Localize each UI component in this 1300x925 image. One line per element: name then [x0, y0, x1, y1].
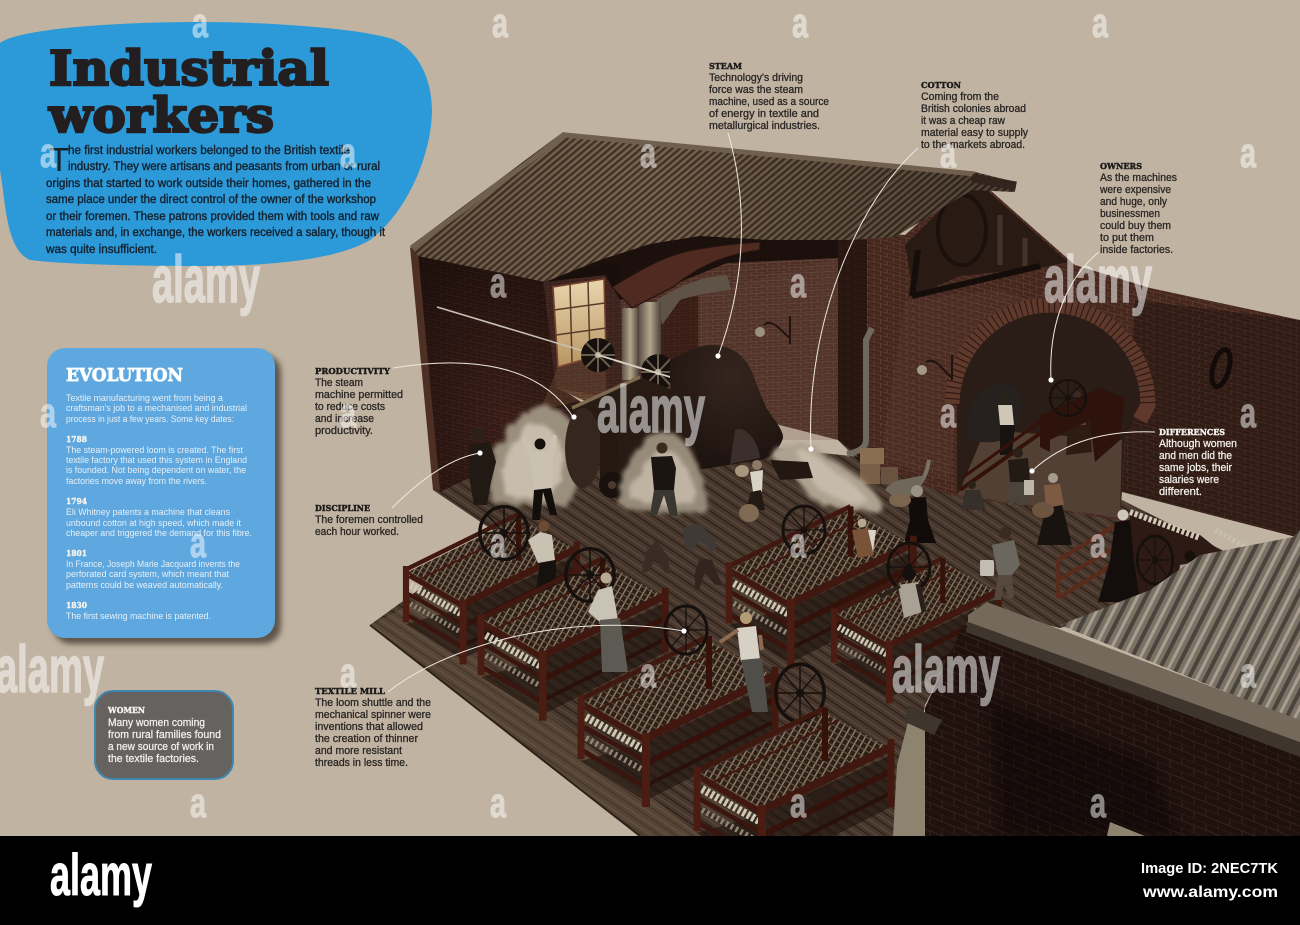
figure: woman in long black dress [1098, 510, 1140, 602]
leader: cotton [811, 148, 918, 449]
date 1794: Eli Whitney patents a machine that cleans [66, 507, 230, 517]
date 1801 [66, 549, 240, 590]
figure: woman at loom 2 [588, 572, 628, 672]
drainpipe [847, 328, 872, 454]
date 1788: The steam-powered loom is created. The first [66, 445, 243, 455]
stock watermarks: a [492, 0, 508, 46]
callout: differences: DIFFERENCES [1159, 428, 1225, 438]
callout: owners: and huge, only [1100, 196, 1168, 208]
callout: differences: different. [1159, 486, 1202, 498]
loom 3 [581, 636, 775, 807]
callout: productivity: to reduce costs [315, 401, 385, 413]
title [48, 41, 329, 144]
loom 6 [834, 558, 999, 703]
evolution intro: process in just a few years. Some key dates: [66, 414, 234, 424]
callout: owners: to put them [1100, 232, 1154, 244]
callout: textile mill [315, 687, 431, 769]
callout: discipline: The foremen controlled [315, 514, 423, 526]
left inner wall [410, 247, 600, 492]
right brick wall [838, 175, 1300, 538]
roof [410, 132, 1016, 282]
date 1801: patterns could be weaved automatically. [66, 580, 223, 590]
callout: cotton [921, 81, 1029, 151]
figure: worker at loom 6 [880, 568, 924, 618]
intro text: T [49, 141, 69, 178]
stock watermarks: alamy [1044, 242, 1152, 316]
callout: owners [1099, 162, 1177, 256]
figure: child at loom [852, 518, 876, 558]
cotton pile centre [618, 432, 707, 514]
front brick wall [925, 625, 1300, 836]
wheel 1 [480, 507, 528, 559]
callout: differences: salaries were [1159, 474, 1219, 486]
callout: steam: STEAM [709, 62, 742, 72]
loom 1 [406, 514, 577, 665]
evolution intro: Textile manufacturing went from being a [66, 393, 224, 403]
callout: steam: machine, used as a source [709, 96, 829, 108]
figure: shirtless worker [798, 720, 838, 824]
intro text: or their foremen. These patrons provided them with tools and raw [46, 209, 379, 223]
stock watermarks: a [1240, 649, 1256, 696]
cotton pile left [489, 407, 582, 507]
figure: woman with basket [1032, 473, 1072, 545]
callout: differences: same jobs, their [1159, 462, 1232, 474]
date 1830: 1830 [66, 601, 87, 611]
stock watermarks: a [1090, 779, 1106, 826]
evolution panel body [47, 348, 275, 638]
wheel 3 [665, 606, 707, 654]
leader: textile mill [388, 625, 684, 692]
footer website: www.alamy.com [1142, 884, 1278, 901]
intro text: industry. They were artisans and peasants from urban or rural [68, 159, 380, 173]
women text: Many women coming [108, 717, 205, 729]
stock watermarks: a [640, 649, 656, 696]
figure: worker at loom 1 [528, 520, 556, 590]
callout: textile mill: the creation of thinner [315, 733, 418, 745]
stock watermarks: alamy [0, 632, 104, 706]
duct and brick hood [612, 242, 760, 380]
stock watermarks: a [340, 649, 356, 696]
callout: productivity [315, 367, 403, 437]
stock watermarks: a [1092, 0, 1108, 46]
callout: cotton: material easy to supply [921, 127, 1029, 139]
leader: owners [1051, 252, 1099, 380]
stock watermarks: a [790, 259, 806, 306]
evolution intro: craftsman's job to a mechanised and industrial [66, 403, 247, 413]
wall lamp right [917, 355, 952, 380]
title: workers [48, 88, 274, 144]
factory floor [370, 430, 1262, 836]
women panel body [95, 691, 233, 779]
callout: differences [1159, 428, 1237, 498]
women text [107, 706, 221, 765]
callout: owners: businessmen [1100, 208, 1160, 220]
back right looms [1058, 512, 1260, 605]
callout: owners: inside factories. [1100, 244, 1173, 256]
stock watermarks: a [790, 779, 806, 826]
steam machine [565, 345, 783, 500]
callout: productivity: productivity. [315, 425, 373, 437]
stock watermarks: a [792, 0, 808, 46]
callout: textile mill: The loom shuttle and the [315, 697, 431, 709]
elbow pipe [900, 460, 929, 495]
figure: man with can [1008, 448, 1034, 505]
wall lamp [755, 316, 790, 344]
callout: textile mill: inventions that allowed [315, 721, 423, 733]
callout: differences: Although women [1159, 438, 1237, 450]
stock watermarks: alamy [597, 372, 705, 446]
callout: productivity: and increase [315, 413, 374, 425]
stock watermarks: alamy [152, 242, 260, 316]
loom inside arch [960, 388, 1125, 490]
panel: evolution [47, 348, 281, 644]
stock watermarks: a [1240, 389, 1256, 436]
back wall with window [543, 228, 838, 440]
callout: productivity: PRODUCTIVITY [315, 367, 391, 377]
stock watermarks: a [490, 259, 506, 306]
cotton pile right [770, 443, 884, 511]
stock watermarks: a [340, 129, 356, 176]
callout: productivity: The steam [315, 377, 363, 389]
evolution panel shadow [53, 354, 281, 644]
leader: differences [1032, 432, 1155, 471]
callout: owners: OWNERS [1100, 162, 1142, 172]
callout: textile mill: mechanical spinner were [315, 709, 431, 721]
callout: textile mill: and more resistant [315, 745, 402, 757]
date 1794: unbound cotton at high speed, which made it [66, 518, 241, 528]
date 1794: 1794 [66, 497, 87, 507]
date 1794: cheaper and triggered the demand for this fibre. [66, 528, 252, 538]
intro text: same place under the direct control of the owner of the workshop [46, 192, 376, 206]
footer logo: alamy [50, 843, 152, 908]
wall hoop [1208, 348, 1234, 388]
leader: discipline [392, 453, 480, 508]
callout: steam: Technology's driving [709, 72, 803, 84]
figure: kneeling worker [962, 481, 986, 510]
date 1801: perforated card system, which meant that [66, 569, 229, 579]
illustration: cutaway textile factory [370, 132, 1300, 879]
evolution intro [66, 393, 247, 424]
stock watermarks: a [790, 519, 806, 566]
callout: discipline: each hour worked. [315, 526, 399, 538]
loom 4 [697, 708, 891, 879]
intro text [45, 141, 386, 256]
callout: steam [709, 62, 829, 132]
leader end dots [477, 353, 1054, 634]
footer image id: Image ID: 2NEC7TK [1141, 860, 1278, 877]
stock watermarks: a [640, 129, 656, 176]
arch opening [952, 305, 1148, 518]
gable timber [905, 178, 1068, 296]
callout: cotton: COTTON [921, 81, 961, 91]
intro text: origins that started to work outside their homes, gathered in the [46, 176, 371, 190]
date 1788: factories move away from the rivers. [66, 476, 207, 486]
footer bar [0, 836, 1300, 925]
stone corner pillar [893, 705, 1145, 836]
callout: steam: force was the steam [709, 84, 803, 96]
date 1788 [66, 435, 247, 486]
women text: a new source of work in [108, 741, 214, 753]
figure: boy with pail [980, 527, 1020, 600]
stock watermarks: a [940, 129, 956, 176]
stone ledge [966, 602, 1300, 757]
callout: cotton: Coming from the [921, 91, 999, 103]
leader: steam [718, 133, 741, 356]
stock watermarks: a [190, 519, 206, 566]
panel: women [95, 691, 233, 779]
figure: man with lever [650, 442, 678, 516]
date 1788: is founded. Not being dependent on water, the [66, 465, 246, 475]
steam shaft and flywheels [437, 307, 690, 390]
callout: owners: could buy them [1100, 220, 1171, 232]
blue title panel [0, 22, 432, 266]
callout: textile mill: threads in less time. [315, 757, 408, 769]
stock watermarks: a [192, 0, 208, 46]
figure: man in white vest [720, 612, 768, 712]
figure: woman with baskets [735, 460, 765, 522]
wheel inside arch [1050, 380, 1086, 416]
stock watermarks: a [490, 779, 506, 826]
stock watermarks: a [190, 779, 206, 826]
women text: WOMEN [107, 706, 145, 716]
figure: woman in black dress [885, 475, 936, 543]
leader lines [388, 133, 1155, 692]
figure: foreman [469, 428, 496, 505]
date 1788: 1788 [66, 435, 87, 445]
wheel 2 [566, 549, 614, 601]
stock watermarks: a [40, 389, 56, 436]
loom 5 [729, 506, 913, 669]
callout: owners: were expensive [1099, 184, 1171, 196]
callout: discipline: DISCIPLINE [315, 504, 370, 514]
evolution heading: EVOLUTION [66, 365, 183, 386]
figures: workers in the arch [998, 391, 1110, 455]
stock watermarks: a [40, 129, 56, 176]
stock watermarks: a [1090, 519, 1106, 566]
date 1830 [66, 601, 211, 621]
stock watermarks: alamy [892, 632, 1000, 706]
title: Industrial [49, 41, 329, 97]
figure: crouched worker [1176, 550, 1200, 592]
wheel 6 [888, 543, 930, 591]
women text: the textile factories. [108, 753, 199, 765]
figures: bending children [642, 523, 722, 590]
stock watermarks: a [340, 389, 356, 436]
loom 2 [481, 558, 665, 721]
window [540, 279, 606, 410]
date 1794 [66, 497, 252, 538]
date 1830: The first sewing machine is patented. [66, 611, 211, 621]
women text: from rural families found [108, 729, 221, 741]
stock watermarks: a [490, 519, 506, 566]
callout: textile mill: TEXTILE MILL [315, 687, 385, 697]
wheel back right [1137, 536, 1173, 584]
stock watermarks: a [1240, 129, 1256, 176]
figure: man in white coat [522, 434, 557, 520]
wheel 5 [783, 506, 825, 554]
callout: discipline [315, 504, 423, 538]
stock watermarks: a [940, 389, 956, 436]
intro text: materials and, in exchange, the workers received a salary, though it [46, 225, 386, 239]
leader: productivity [393, 363, 573, 417]
date 1801: In France, Joseph Marie Jacquard invents the [66, 559, 240, 569]
callout: owners: As the machines [1100, 172, 1177, 184]
date 1788: textile factory that used this system in England [66, 455, 247, 465]
date 1801: 1801 [66, 549, 87, 559]
intro text: was quite insufficient. [45, 242, 157, 256]
corrugated front roof [1060, 530, 1300, 722]
callout: cotton: British colonies abroad [921, 103, 1026, 115]
callout: steam: of energy in textile and [709, 108, 819, 120]
callout: productivity: machine permitted [315, 389, 403, 401]
callout: steam: metallurgical industries. [709, 120, 820, 132]
intro text: he first industrial workers belonged to the British textile [68, 143, 350, 157]
callout: cotton: to the markets abroad. [921, 139, 1025, 151]
callout: cotton: it was a cheap raw [921, 115, 1005, 127]
callout: differences: and men did the [1159, 450, 1232, 462]
wooden crates [860, 448, 898, 484]
wheel 4 [776, 664, 824, 722]
